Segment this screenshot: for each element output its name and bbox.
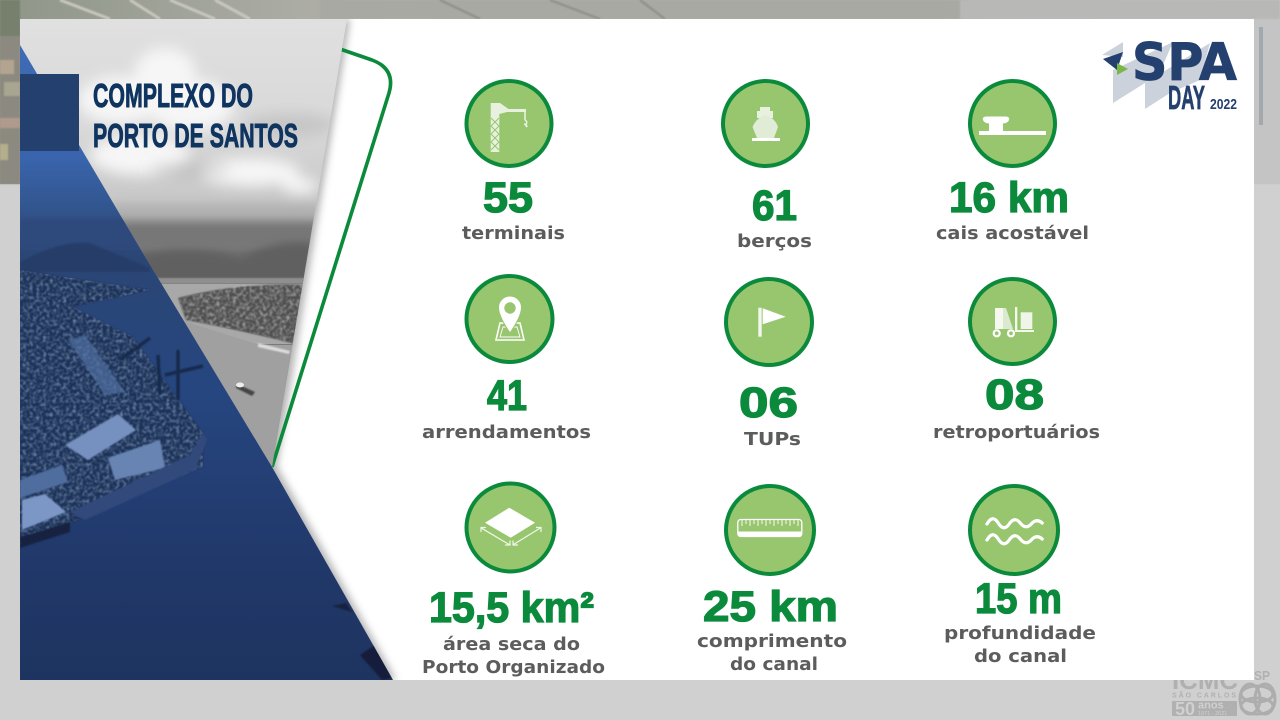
background aerial photo strip [0,0,1280,184]
icon: crane [466,81,552,166]
title accent square [20,74,79,151]
title: COMPLEXO DO [93,77,253,114]
label: comprimento [697,631,847,652]
label [944,623,1096,667]
label: profundidade [944,623,1096,644]
watermark: ICMC USP 50 anos logo: 50 [1175,699,1195,719]
icon: map pin [466,276,552,362]
stat: 55 terminais [462,81,565,244]
number: 61 [752,182,797,230]
number: 16 km [949,174,1069,222]
stat: 06 TUPs [726,279,812,450]
label: do canal [730,654,818,675]
stat: 08 retroportuários [933,279,1100,443]
SPA Day 2022 logo: 2022 [1210,96,1237,113]
watermark: ICMC USP 50 anos logo [1172,665,1275,719]
icon: ruler [726,486,814,574]
number: 15 m [975,575,1062,623]
SPA Day 2022 logo [1102,33,1237,116]
icon: area square [466,484,554,572]
label: do canal [974,646,1067,667]
label: retroportuários [933,422,1100,443]
label: área seca do [443,634,580,655]
icon: forklift [970,279,1055,364]
number: 25 km [703,583,838,631]
stat: 15,5 km² área seca [422,484,605,678]
label: TUPs [744,429,801,450]
number: 15,5 km² [429,584,594,632]
title [93,77,298,154]
label: cais acostável [936,223,1089,244]
label [422,634,605,678]
label: arrendamentos [422,422,591,443]
icon: quay bollard [970,81,1055,166]
number: 41 [487,372,527,420]
green rounded outline [272,49,391,467]
label: berços [737,231,812,252]
icon: flag [726,279,812,365]
photo shadow on panel [20,19,396,680]
watermark: ICMC USP 50 anos logo: SP [1254,668,1270,683]
number: 55 [483,174,533,222]
label: terminais [462,223,565,244]
watermark: ICMC USP 50 anos logo: 1971 - 2021 [1198,711,1227,717]
photo: grey sky and port [20,19,350,480]
SPA Day 2022 logo: SPA [1132,33,1237,93]
watermark: ICMC USP 50 anos logo: anos [1198,700,1224,712]
number: 06 [739,379,798,427]
icon: waves [970,486,1058,574]
stat: 61 berços [723,81,812,252]
watermark: ICMC USP 50 anos logo: ICMC [1172,665,1238,695]
icon: ship [723,81,808,166]
number: 08 [985,371,1044,419]
label: Porto Organizado [422,657,605,678]
stat: 41 arrendamentos [422,276,591,443]
stat: 15 m profundidade do canal [944,486,1096,667]
stat: 25 km comprimento do canal [697,486,847,675]
photo: blue-tinted port [20,40,400,680]
title: PORTO DE SANTOS [93,117,298,154]
SPA Day 2022 logo: DAY [1168,79,1205,116]
stat: 16 km cais acostável [936,81,1089,244]
label [697,631,847,675]
watermark: ICMC USP 50 anos logo: SÃO CARLOS [1172,690,1236,700]
